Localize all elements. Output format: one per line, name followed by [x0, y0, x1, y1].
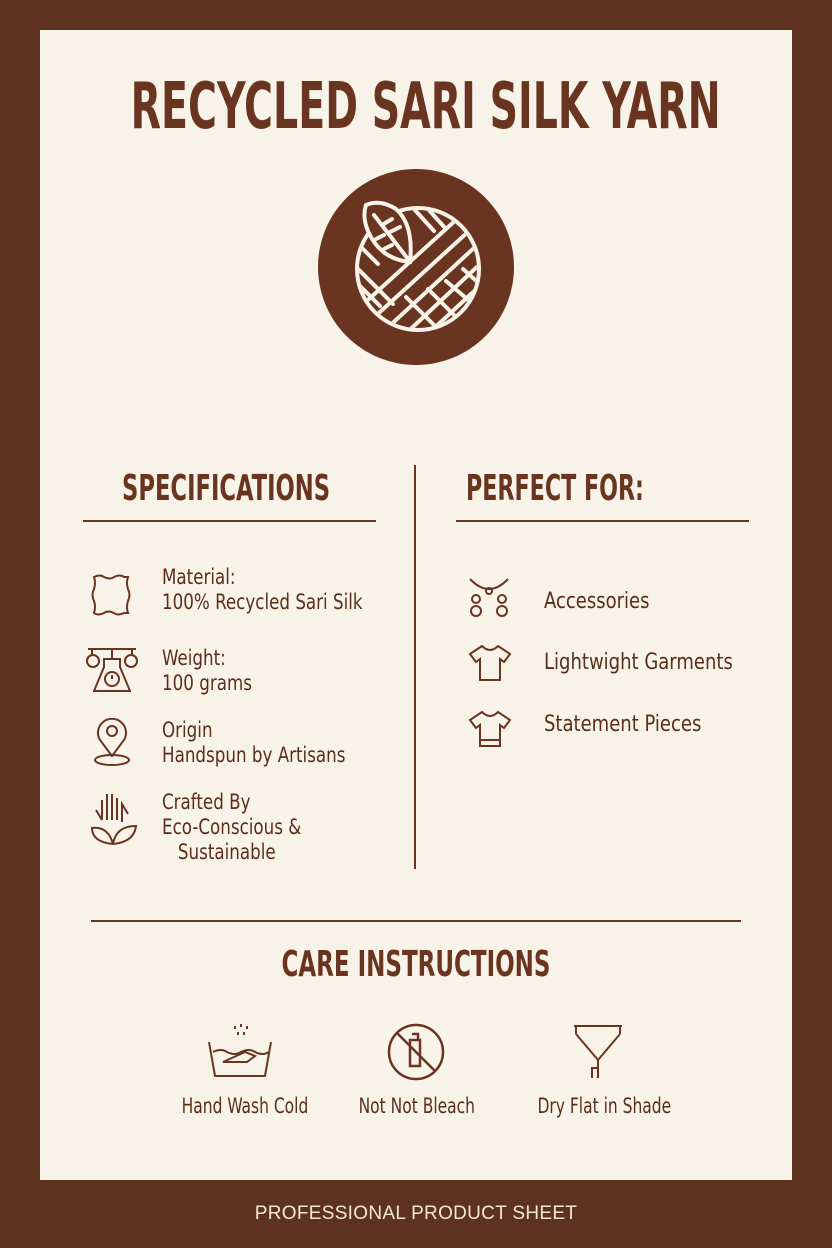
footer text: PROFESSIONAL PRODUCT SHEET [255, 1203, 577, 1224]
spec: material: Material: [162, 565, 236, 589]
care: hand wash [182, 1024, 308, 1118]
spec: origin: Handspun by Artisans [162, 743, 345, 767]
spec: origin: Origin [162, 718, 213, 742]
spec: crafted by: Sustainable [178, 840, 276, 864]
care: no bleach: Not Not Bleach [359, 1094, 475, 1118]
perfect: accessories [469, 578, 650, 617]
perfect: accessories: Accessories [544, 589, 650, 614]
title: RECYCLED SARI SILK YARN [131, 70, 721, 144]
care: no bleach [359, 1024, 475, 1118]
care: hand wash: Hand Wash Cold [182, 1094, 308, 1118]
perfect: statement pieces [468, 710, 701, 747]
heading: perfect for: PERFECT FOR: [466, 468, 644, 509]
heading: care instructions: CARE INSTRUCTIONS [282, 944, 550, 985]
icon: yarn ball logo [318, 169, 514, 365]
perfect: statement pieces: Statement Pieces [544, 712, 701, 737]
spec: crafted by: Crafted By [162, 790, 250, 814]
spec: weight: Weight: [162, 646, 226, 670]
care: dry flat [538, 1025, 671, 1118]
spec: crafted by [91, 790, 301, 864]
spec: origin [94, 718, 345, 767]
spec: weight: 100 grams [162, 671, 252, 695]
spec: material: 100% Recycled Sari Silk [162, 590, 363, 614]
spec: weight [86, 646, 252, 695]
spec: material [92, 565, 363, 616]
heading: specifications: SPECIFICATIONS [122, 468, 330, 509]
perfect: lightweight garments [468, 644, 733, 681]
care: dry flat: Dry Flat in Shade [538, 1094, 671, 1118]
perfect: lightweight garments: Lightwight Garments [544, 650, 733, 675]
spec: crafted by: Eco-Conscious & [162, 815, 301, 839]
